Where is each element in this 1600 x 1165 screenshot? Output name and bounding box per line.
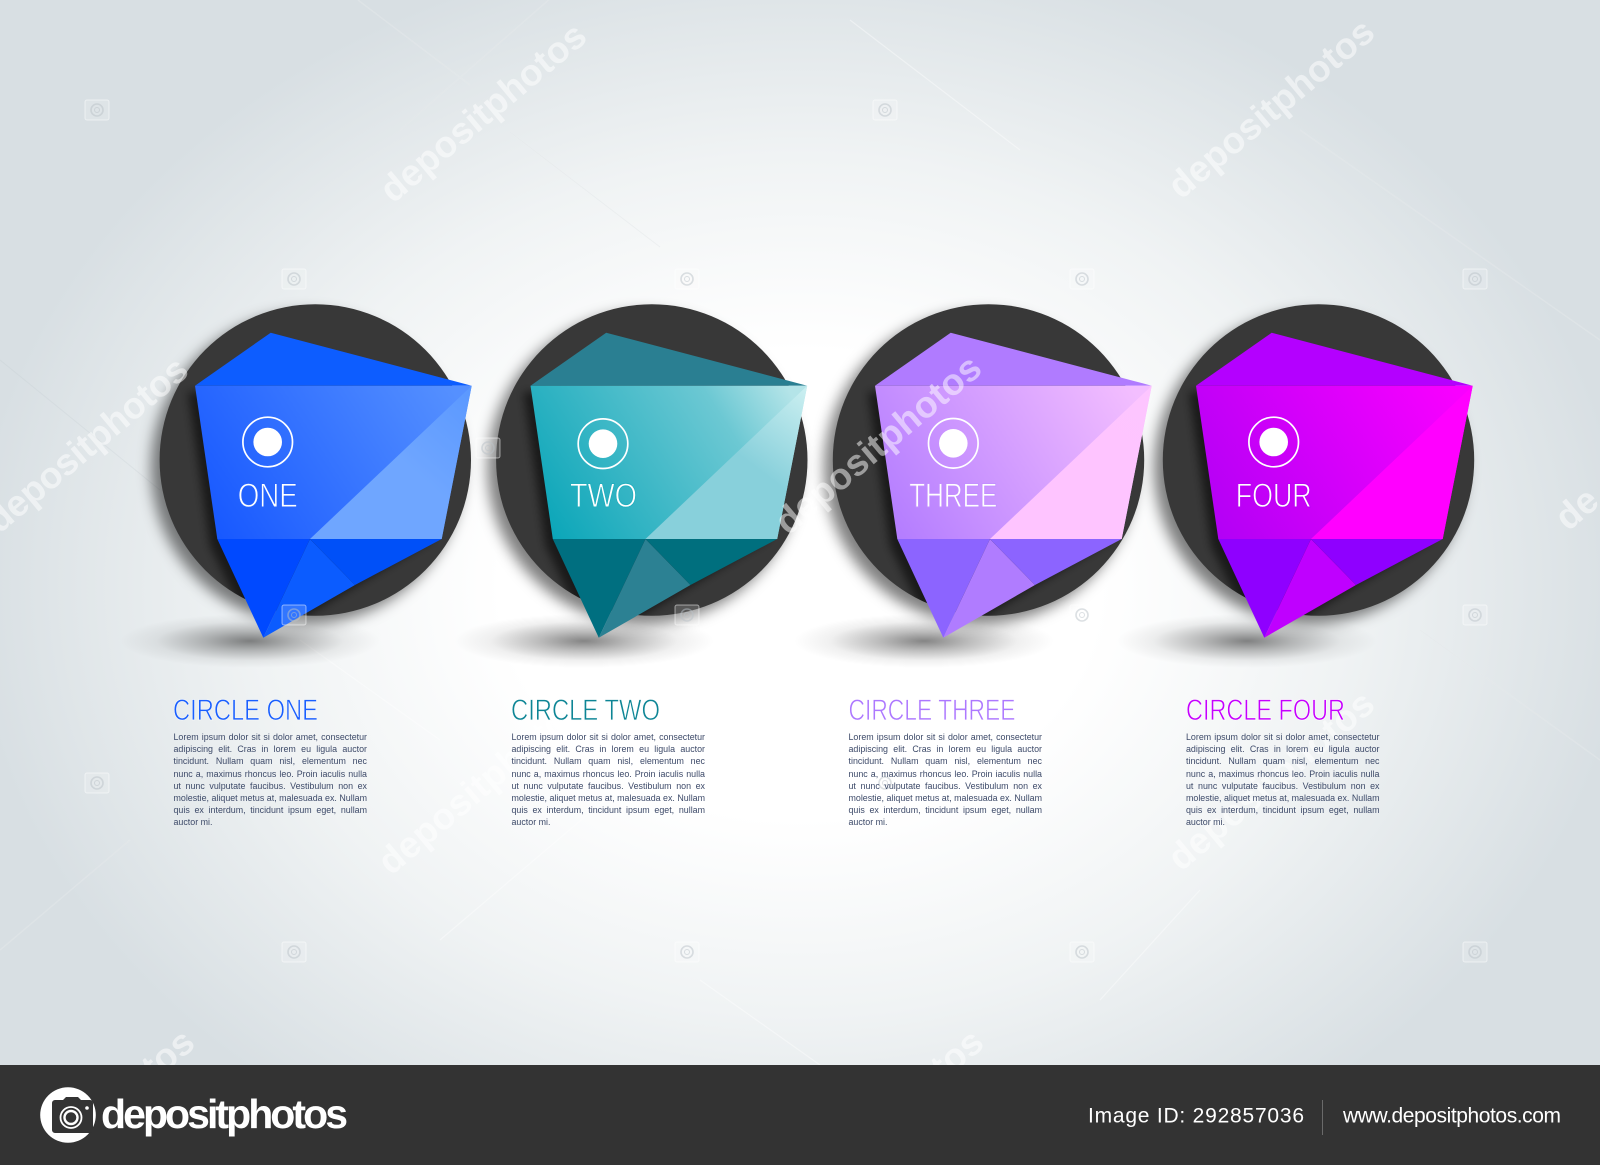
ground shadow three [794, 614, 1054, 668]
text block: circle three [848, 732, 1042, 827]
text block: circle two [512, 732, 705, 827]
icon: ring four [1249, 417, 1298, 467]
text block: circle one: auctor mi. [174, 817, 212, 827]
text block: circle three: ut nunc vulputate faucibus. Vestibulum non ex [848, 781, 1042, 791]
text block: circle four: nunc a, maximus rhoncus leo. Proin iaculis nulla [1186, 769, 1380, 779]
text block: circle two: tincidunt. Nullam quam nisl, elementum nec [512, 756, 705, 766]
text block: circle three: Lorem ipsum dolor sit si dolor amet, consectetur [848, 732, 1042, 742]
heading: circle one: CIRCLE ONE [173, 694, 318, 727]
text block: circle one: Lorem ipsum dolor sit si dolor amet, consectetur [174, 732, 367, 742]
text block: circle four [1186, 732, 1380, 827]
ground shadow four [1117, 614, 1377, 668]
icon: depositphotos camera logo [40, 1087, 96, 1143]
url: www.depositphotos.com [1342, 1104, 1561, 1128]
text block: circle two: Lorem ipsum dolor sit si dolor amet, consectetur [512, 732, 705, 742]
text block: circle three: auctor mi. [848, 817, 887, 827]
text block: circle three: quis ex interdum, tincidunt ipsum eget, nullam [848, 805, 1042, 815]
panel: circle one graphic [120, 304, 472, 668]
crystal speech shape four [1189, 333, 1473, 645]
watermark: depositphotos: depositphotos [767, 346, 989, 542]
text block: circle four: quis ex interdum, tincidunt ipsum eget, nullam [1186, 805, 1380, 815]
watermark: camera icons [85, 100, 1487, 962]
panel: circle two graphic [454, 304, 808, 668]
text block: circle two: ut nunc vulputate faucibus. Vestibulum non ex [512, 781, 705, 791]
watermark: depositphotos: depositphotos [1160, 10, 1382, 206]
ground shadow one [120, 614, 380, 668]
watermark: depositphotos: depositphotos [1160, 682, 1382, 878]
watermark: depositphotos: depositphotos [372, 14, 594, 210]
text block: circle three: tincidunt. Nullam quam nisl, elementum nec [848, 756, 1042, 766]
watermark: depositphotos: tos [133, 1021, 202, 1088]
text block: circle three: adipiscing elit. Cras in lorem eu ligula auctor [848, 744, 1042, 754]
text block: circle four: adipiscing elit. Cras in lorem eu ligula auctor [1186, 744, 1380, 754]
dark circle three [824, 304, 1144, 624]
heading: circle three: CIRCLE THREE [848, 694, 1016, 727]
dark circle four [1154, 304, 1474, 624]
dark circle two [488, 304, 808, 624]
icon: ring two [578, 419, 628, 469]
image id: Image ID: 292857036 [1088, 1104, 1304, 1128]
logo wordmark: depositphotos [101, 1091, 348, 1137]
text block: circle four: ut nunc vulputate faucibus. Vestibulum non ex [1186, 781, 1380, 791]
text block: circle two: auctor mi. [512, 817, 550, 827]
heading: circle four: CIRCLE FOUR [1186, 694, 1345, 727]
text block: circle two: molestie, aliquet metus at, malesuada ex. Nullam [512, 793, 705, 803]
footer bar [0, 1065, 1600, 1165]
text block: circle two: quis ex interdum, tincidunt ipsum eget, nullam [512, 805, 705, 815]
text block: circle three: molestie, aliquet metus at, malesuada ex. Nullam [848, 793, 1042, 803]
text block: circle four: Lorem ipsum dolor sit si dolor amet, consectetur [1186, 732, 1380, 742]
text block: circle one: molestie, aliquet metus at, malesuada ex. Nullam [174, 793, 367, 803]
heading: circle two: CIRCLE TWO [511, 694, 660, 727]
icon: ring three [928, 418, 978, 468]
panel: circle three graphic [794, 304, 1152, 668]
text block: circle one: nunc a, maximus rhoncus leo. Proin iaculis nulla [174, 769, 367, 779]
text block: circle four: tincidunt. Nullam quam nisl, elementum nec [1186, 756, 1380, 766]
crystal speech shape one [188, 333, 472, 645]
text block: circle one: tincidunt. Nullam quam nisl, elementum nec [174, 756, 367, 766]
label: THREE: THREE [909, 477, 997, 515]
watermark: depositphotos: tos [922, 1021, 991, 1088]
dark circle one [151, 304, 471, 624]
label: FOUR: FOUR [1236, 477, 1312, 515]
panel: circle four graphic [1117, 304, 1474, 668]
text block: circle one: quis ex interdum, tincidunt ipsum eget, nullam [174, 805, 367, 815]
text block: circle three: nunc a, maximus rhoncus leo. Proin iaculis nulla [848, 769, 1042, 779]
text block: circle one: ut nunc vulputate faucibus. Vestibulum non ex [174, 781, 367, 791]
ground shadow two [454, 614, 714, 668]
label: TWO: TWO [570, 477, 637, 515]
text block: circle four: molestie, aliquet metus at, malesuada ex. Nullam [1186, 793, 1380, 803]
text block: circle two: nunc a, maximus rhoncus leo. Proin iaculis nulla [512, 769, 705, 779]
watermark: depositphotos: depositphotos [370, 686, 592, 882]
crystal speech shape two [524, 333, 807, 645]
icon: ring one [243, 417, 292, 467]
text block: circle one [174, 732, 367, 827]
crystal speech shape three [868, 333, 1152, 645]
text block: circle four: auctor mi. [1186, 817, 1225, 827]
text block: circle one: adipiscing elit. Cras in lorem eu ligula auctor [174, 744, 367, 754]
text block: circle two: adipiscing elit. Cras in lorem eu ligula auctor [512, 744, 705, 754]
label: ONE: ONE [238, 477, 298, 515]
